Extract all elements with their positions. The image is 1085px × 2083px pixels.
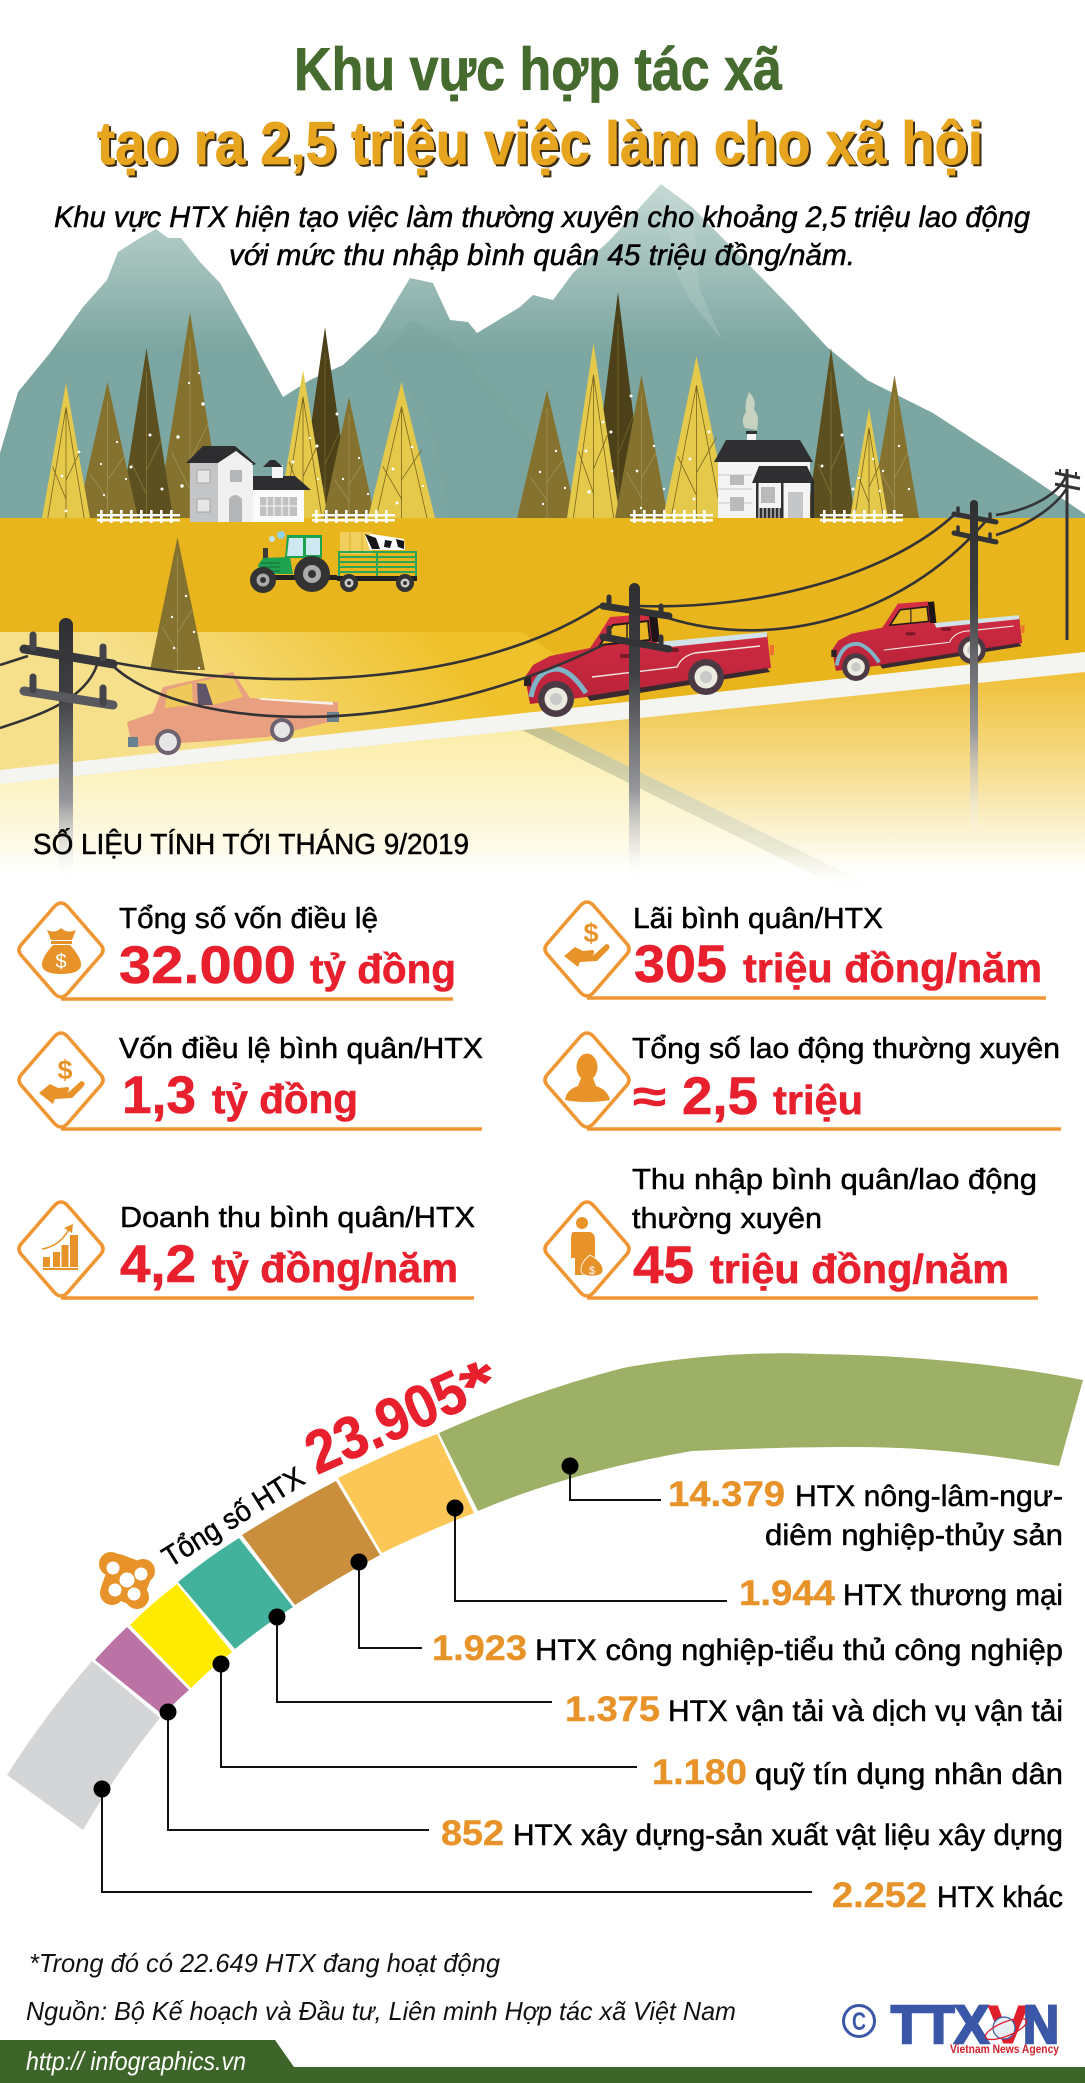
- panel: landscape scene: [0, 184, 1085, 886]
- ground: fields and road: [0, 518, 1085, 885]
- icon: growth chart: [42, 1224, 78, 1270]
- arc segment: agriculture: [439, 1353, 1083, 1511]
- label: commerce: [739, 1574, 1063, 1613]
- label: credit funds: quỹ tín dụng nhân dân: [755, 1758, 1063, 1791]
- icon: linked hands: [99, 1552, 155, 1609]
- label: transport: [565, 1690, 1063, 1729]
- source: Nguồn: Bộ Kế hoạch và Đầu tư, Liên minh Hợp tác xã Việt Nam: [26, 1996, 736, 2026]
- house: right with chimney smoke: [714, 392, 815, 518]
- label: other: 2.252: [832, 1876, 927, 1915]
- stat: average charter capital: [19, 1033, 483, 1129]
- logo: TTXVN: Vietnam News Agency: [950, 2042, 1059, 2056]
- utility pole: right: [954, 500, 996, 830]
- truck: small red: [831, 601, 1025, 681]
- total label: Tổng số HTX: [157, 1461, 310, 1574]
- icon: hand with dollar: $: [583, 918, 599, 948]
- mountains: [0, 184, 1085, 518]
- stat: average income: 45: [633, 1236, 694, 1295]
- title: [97, 36, 983, 177]
- label: agriculture: diêm nghiệp-thủy sản: [765, 1519, 1063, 1552]
- total label: [157, 1346, 508, 1574]
- power lines: [0, 476, 1068, 728]
- stat: average profit: Lãi bình quân/HTX: [633, 903, 883, 935]
- label: construction: 852: [441, 1814, 504, 1853]
- arc segment: construction: [95, 1627, 189, 1715]
- subtitle: [54, 201, 1030, 272]
- label: agriculture: [668, 1475, 1063, 1552]
- truck: large red: [524, 614, 774, 717]
- label: other: [832, 1876, 1063, 1915]
- icon: hand with dollar: [564, 918, 610, 967]
- logo: TTXVN: [844, 1995, 1059, 2056]
- stat: regular workers: 2,5: [682, 1067, 758, 1126]
- stat: average income: thường xuyên: [632, 1203, 822, 1235]
- panel: arc chart of cooperatives by sector: [7, 1346, 1083, 1915]
- stat: regular workers: ≈: [633, 1070, 666, 1122]
- stat: average revenue: 4,2: [120, 1235, 196, 1294]
- stat: average charter capital: 1,3: [122, 1066, 196, 1125]
- label: commerce: 1.944: [739, 1574, 836, 1613]
- stat: average revenue: tỷ đồng/năm: [212, 1245, 458, 1291]
- stat: average revenue: [19, 1202, 475, 1298]
- stat: regular workers: Tổng số lao động thường xuyên: [632, 1033, 1060, 1065]
- label: industry: [432, 1629, 1063, 1668]
- stat: charter capital: tỷ đồng: [310, 946, 456, 992]
- logo: TTXVN: C: [852, 2008, 866, 2036]
- stat: average revenue: Doanh thu bình quân/HTX: [120, 1202, 475, 1234]
- stat: average profit: 305: [634, 935, 727, 994]
- icon: money bag: [42, 928, 81, 974]
- utility pole: left: [24, 618, 113, 880]
- stat: average income: Thu nhập bình quân/lao động: [632, 1164, 1037, 1196]
- footer bar: http:// infographics.vn: [26, 2046, 246, 2076]
- icon: person: [565, 1054, 610, 1102]
- stat: average income: [545, 1164, 1038, 1298]
- arc segment: credit funds: [130, 1584, 232, 1688]
- snow dots: [61, 372, 910, 669]
- stat: charter capital: [19, 903, 456, 999]
- stat: average charter capital: tỷ đồng: [212, 1076, 358, 1122]
- title: tạo ra 2,5 triệu việc làm cho xã hội: [97, 110, 983, 177]
- leader lines: [102, 1466, 812, 1892]
- label: industry: HTX công nghiệp-tiểu thủ công nghiệp: [535, 1634, 1063, 1667]
- label: credit funds: 1.180: [652, 1753, 747, 1792]
- arc segment: transport: [178, 1538, 293, 1649]
- label: credit funds: [652, 1753, 1063, 1792]
- label: industry: 1.923: [432, 1629, 527, 1668]
- logo: TTXVN: TTX: [891, 1995, 989, 2055]
- arc segment: commerce: [338, 1434, 474, 1553]
- label: agriculture: 14.379: [668, 1475, 785, 1514]
- icon: money bag: $: [55, 951, 67, 973]
- stat: average charter capital: Vốn điều lệ bình quân/HTX: [119, 1033, 483, 1065]
- total label: 23.905: [295, 1357, 477, 1487]
- utility pole: centre: [603, 583, 669, 880]
- pine trees: [42, 292, 919, 670]
- footnote: *Trong đó có 22.649 HTX đang hoạt động: [29, 1948, 501, 1978]
- icon: hand with dollar: [39, 1055, 85, 1104]
- stat: charter capital: Tổng số vốn điều lệ: [119, 903, 378, 935]
- label: commerce: HTX thương mại: [843, 1579, 1063, 1612]
- stat: average profit: [545, 902, 1046, 998]
- icon: hand with dollar: $: [57, 1055, 73, 1085]
- utility pole: far: [1055, 469, 1080, 640]
- subtitle: với mức thu nhập bình quân 45 triệu đồng/năm.: [229, 239, 855, 272]
- subtitle: Khu vực HTX hiện tạo việc làm thường xuyên cho khoảng 2,5 triệu lao động: [54, 201, 1030, 234]
- leader dots: [94, 1458, 578, 1798]
- label: transport: HTX vận tải và dịch vụ vận tải: [668, 1695, 1063, 1728]
- arc segment: other: [7, 1661, 160, 1830]
- stat: charter capital: 32.000: [119, 936, 296, 995]
- icon: person with money bag: [571, 1217, 603, 1277]
- icon: person with money bag: $: [589, 1265, 595, 1277]
- stat: average profit: triệu đồng/năm: [743, 945, 1042, 991]
- fences: [97, 510, 903, 523]
- title: Khu vực hợp tác xã: [294, 36, 783, 103]
- section heading: SỐ LIỆU TÍNH TỚI THÁNG 9/2019: [33, 827, 469, 861]
- house: left: [186, 446, 311, 522]
- arc segment: industry: [242, 1481, 380, 1605]
- logo: TTXVN: N: [1023, 1995, 1059, 2055]
- tractor with trailer and cow: [250, 531, 417, 593]
- stat: regular workers: [545, 1033, 1061, 1129]
- footer bar: [0, 2040, 1085, 2083]
- label: transport: 1.375: [565, 1690, 660, 1729]
- panel: statistics: [19, 902, 1061, 1298]
- stat: average income: triệu đồng/năm: [710, 1246, 1009, 1292]
- logo: TTXVN: V: [988, 1995, 1028, 2055]
- label: construction: HTX xây dựng-sản xuất vật liệu xây dựng: [513, 1819, 1063, 1852]
- car: salmon: [127, 672, 339, 755]
- label: other: HTX khác: [937, 1881, 1063, 1914]
- label: agriculture: HTX nông-lâm-ngư-: [795, 1480, 1063, 1513]
- total label: *: [451, 1346, 508, 1423]
- stat: regular workers: triệu: [773, 1077, 863, 1123]
